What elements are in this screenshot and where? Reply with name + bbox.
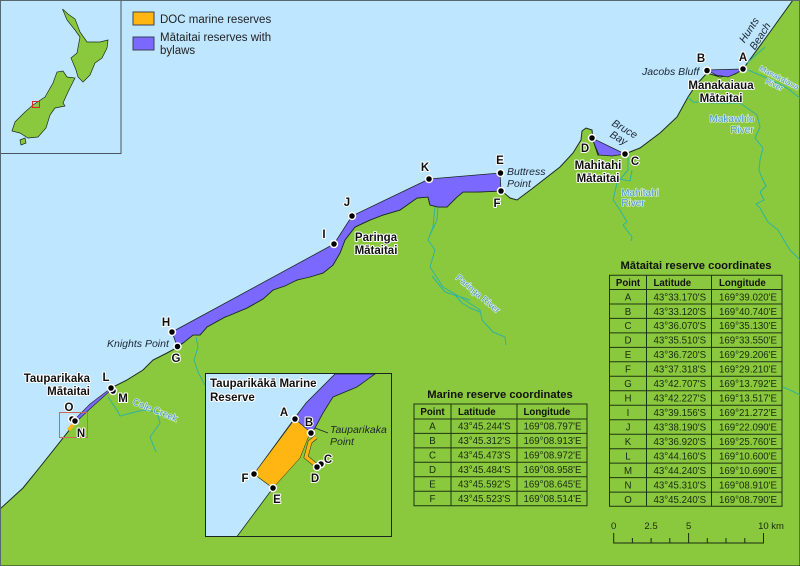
inset land xyxy=(237,374,392,536)
table: marine reserve coordinates: A xyxy=(429,422,436,433)
table: marine reserve coordinates: 43°45.244'S xyxy=(458,422,511,433)
inset point letters: C xyxy=(324,454,332,466)
table: mātaitai reserve coordinates: M xyxy=(624,466,632,477)
reserve: Manakaiaua Mātaitai area xyxy=(707,69,743,77)
table: mātaitai reserve coordinates xyxy=(610,260,782,506)
scale bar: 10 km xyxy=(758,521,784,532)
legend xyxy=(133,12,271,57)
table: mātaitai reserve coordinates: 169°33.550'E xyxy=(719,336,778,347)
point letters on main map: F xyxy=(493,198,501,210)
legend label: mātaitai reserves: Mātaitai reserves with xyxy=(160,32,271,44)
table: mātaitai reserve coordinates: 43°36.070'S xyxy=(654,321,707,332)
table: mātaitai reserve coordinates: 169°39.020'E xyxy=(719,292,778,303)
table: mātaitai reserve coordinates: 169°08.790'E xyxy=(719,495,778,506)
table: mātaitai reserve coordinates: A xyxy=(625,292,632,303)
inset point letters xyxy=(241,407,332,506)
legend swatch: marine reserves xyxy=(133,12,154,25)
table: mātaitai reserve coordinates: O xyxy=(624,495,632,506)
inset point letters: A xyxy=(280,407,288,419)
marine reserve small marker xyxy=(67,423,75,431)
place labels: Bay xyxy=(608,129,630,148)
river labels: Mahitahi xyxy=(621,188,659,199)
table: mātaitai reserve coordinates: Longitude xyxy=(719,278,766,289)
table: mātaitai reserve coordinates: 43°42.707'S xyxy=(654,379,707,390)
table: marine reserve coordinates xyxy=(414,389,587,506)
table: marine reserve coordinates: C xyxy=(429,451,436,462)
reserve: Tauparikaka Mātaitai strip xyxy=(76,388,111,422)
place labels: Point xyxy=(507,178,532,190)
scale bar: 0 xyxy=(611,521,616,532)
table: marine reserve coordinates: Longitude xyxy=(524,407,571,418)
place labels: Mātaitai xyxy=(47,386,90,398)
inset place label: Tauparikaka xyxy=(330,424,387,436)
table: mātaitai reserve coordinates: 169°13.517'E xyxy=(719,394,778,405)
river labels: Makawhio xyxy=(709,114,755,125)
table: mātaitai reserve coordinates: 43°37.318'S xyxy=(654,365,707,376)
river labels: River xyxy=(730,125,754,136)
inset marine reserve tail xyxy=(306,437,317,466)
point markers on main map xyxy=(68,66,746,424)
point letters on main map: O xyxy=(65,402,74,414)
point letters on main map: E xyxy=(496,155,504,167)
place labels: Mātaitai xyxy=(355,245,397,257)
table: mātaitai reserve coordinates: Latitude xyxy=(654,278,692,289)
inset title: Reserve xyxy=(210,392,255,404)
location box on main map xyxy=(60,412,88,438)
table: marine reserve coordinates: 43°45.523'S xyxy=(458,494,511,505)
table: marine reserve coordinates: 43°45.473'S xyxy=(458,451,511,462)
table: mātaitai reserve coordinates: 43°44.240'S xyxy=(654,466,707,477)
point letters on main map: J xyxy=(344,197,350,209)
table: mātaitai reserve coordinates: 169°10.690'E xyxy=(719,466,778,477)
inset point letters: F xyxy=(241,473,249,485)
mātaitai table title: Mātaitai reserve coordinates xyxy=(620,260,772,272)
table: marine reserve coordinates: 43°45.312'S xyxy=(458,436,511,447)
place labels xyxy=(24,15,774,398)
marine table grid xyxy=(414,404,587,506)
river labels: River xyxy=(621,198,645,209)
table: mātaitai reserve coordinates: 43°35.510'S xyxy=(654,336,707,347)
place labels: Buttress xyxy=(507,166,546,178)
table: mātaitai reserve coordinates: E xyxy=(625,350,632,361)
table: mātaitai reserve coordinates: 43°36.920'S xyxy=(654,437,707,448)
river labels: River xyxy=(764,77,785,93)
table: mātaitai reserve coordinates: 169°25.760'E xyxy=(719,437,778,448)
place labels: Beach xyxy=(747,20,774,52)
table: mātaitai reserve coordinates: 43°44.160'S xyxy=(654,451,707,462)
table: mātaitai reserve coordinates: 43°36.720'S xyxy=(654,350,707,361)
river labels: Cole Creek xyxy=(131,397,179,425)
table: marine reserve coordinates: 169°08.913'E xyxy=(524,436,582,447)
inset marine reserve area xyxy=(254,419,311,488)
table: mātaitai reserve coordinates: 43°45.310'S xyxy=(654,480,707,491)
point letters on main map: I xyxy=(322,229,326,241)
table: mātaitai reserve coordinates: C xyxy=(624,321,632,332)
inset mātaitai area xyxy=(295,374,375,433)
South Island xyxy=(12,71,75,138)
table: mātaitai reserve coordinates: 169°40.740'E xyxy=(719,307,778,318)
reserve: Paringa Mātaitai area xyxy=(172,173,501,346)
table: marine reserve coordinates: 43°45.484'S xyxy=(458,465,511,476)
table: marine reserve coordinates: 169°08.514'E xyxy=(524,494,582,505)
place labels: Mātaitai xyxy=(577,173,619,185)
table: mātaitai reserve coordinates: 169°29.206'E xyxy=(719,350,778,361)
table: marine reserve coordinates: F xyxy=(430,494,436,505)
table: mātaitai reserve coordinates: 43°45.240'S xyxy=(654,495,707,506)
location box xyxy=(32,102,40,108)
marine table title: Marine reserve coordinates xyxy=(427,389,573,401)
table: mātaitai reserve coordinates: 43°39.156'S xyxy=(654,408,707,419)
point letters on main map: A xyxy=(739,52,747,64)
North Island xyxy=(62,9,108,82)
table: mātaitai reserve coordinates: J xyxy=(626,422,631,434)
inset frame xyxy=(206,374,392,536)
river labels: Manakaiaua xyxy=(758,64,800,92)
table: mātaitai reserve coordinates: 169°13.792'E xyxy=(719,379,778,390)
scale bar: 2.5 xyxy=(644,521,658,532)
point letters on main map xyxy=(65,52,747,440)
point letters on main map: G xyxy=(172,353,181,365)
mātaitai table grid xyxy=(610,275,782,506)
table: marine reserve coordinates: 169°08.958'E xyxy=(524,465,582,476)
legend swatch: mātaitai reserves xyxy=(133,37,154,50)
place labels: Jacobs Bluff xyxy=(641,66,700,78)
scale bar xyxy=(611,521,784,543)
point letters on main map: M xyxy=(118,393,128,405)
table: marine reserve coordinates: 43°45.592'S xyxy=(458,480,511,490)
point letters on main map: L xyxy=(102,372,110,384)
inset point letters: B xyxy=(305,417,313,429)
inset leader line xyxy=(315,428,328,433)
table: mātaitai reserve coordinates: B xyxy=(625,307,631,318)
table: mātaitai reserve coordinates: 169°35.130'E xyxy=(719,321,778,332)
legend label: mātaitai reserves: bylaws xyxy=(160,45,195,57)
table: marine reserve coordinates: Latitude xyxy=(458,407,496,418)
table: marine reserve coordinates: D xyxy=(429,465,436,476)
table: mātaitai reserve coordinates: 43°33.120'S xyxy=(654,307,707,318)
table: marine reserve coordinates: 169°08.972'E xyxy=(524,451,582,462)
table: mātaitai reserve coordinates: 169°22.090'E xyxy=(719,422,778,434)
table: marine reserve coordinates: 169°08.645'E xyxy=(524,480,582,490)
point letters on main map: H xyxy=(162,317,170,329)
inset title: Tauparikākā Marine xyxy=(210,378,317,390)
table: mātaitai reserve coordinates: Point xyxy=(616,278,641,289)
table: mātaitai reserve coordinates: 43°38.190'S xyxy=(654,422,707,434)
inset map: Tauparikākā Marine Reserve xyxy=(206,374,392,536)
table: mātaitai reserve coordinates: 169°10.600'E xyxy=(719,451,778,462)
place labels: Hunts xyxy=(737,15,762,45)
place labels: Knights Point xyxy=(107,338,170,350)
table: mātaitai reserve coordinates: F xyxy=(625,365,631,376)
table: mātaitai reserve coordinates: I xyxy=(627,408,629,419)
table: mātaitai reserve coordinates: 169°21.272'E xyxy=(719,408,778,419)
place labels: Mahitahi xyxy=(575,160,621,172)
table: mātaitai reserve coordinates: K xyxy=(625,437,632,448)
place labels: Manakaiaua xyxy=(688,80,754,92)
place labels: Mātaitai xyxy=(700,93,742,105)
Stewart Island xyxy=(20,138,26,145)
table: mātaitai reserve coordinates: N xyxy=(624,480,632,491)
table: mātaitai reserve coordinates: 43°42.227'S xyxy=(654,394,707,405)
table: marine reserve coordinates: 169°08.797'E xyxy=(524,422,582,433)
point letters on main map: D xyxy=(581,143,589,155)
rivers xyxy=(108,47,800,452)
table: mātaitai reserve coordinates: 169°08.910'E xyxy=(719,480,778,491)
inset map: New Zealand xyxy=(0,0,121,154)
reserve: Mahitahi Mātaitai area xyxy=(592,138,625,156)
inset point letters: D xyxy=(311,473,319,485)
inset point letters: E xyxy=(273,494,281,506)
inset markers xyxy=(250,416,324,492)
legend label: marine reserves: DOC marine reserves xyxy=(160,14,271,26)
table: mātaitai reserve coordinates: 43°33.170'S xyxy=(654,292,707,303)
scale bar: 5 xyxy=(686,521,691,532)
table: mātaitai reserve coordinates: 169°29.210'E xyxy=(719,365,778,376)
place labels: Paringa xyxy=(355,232,398,244)
table: marine reserve coordinates: B xyxy=(429,436,436,447)
table: mātaitai reserve coordinates: L xyxy=(625,451,631,462)
point letters on main map: N xyxy=(77,428,85,440)
table: mātaitai reserve coordinates: H xyxy=(624,394,632,405)
point letters on main map: K xyxy=(421,162,430,174)
inset place label: Point xyxy=(330,436,355,448)
table: mātaitai reserve coordinates: G xyxy=(624,379,632,390)
table: marine reserve coordinates: E xyxy=(429,480,436,490)
river labels xyxy=(131,64,800,425)
table: marine reserve coordinates: Point xyxy=(420,407,445,418)
place labels: Tauparikaka xyxy=(24,373,91,385)
place labels: Bruce xyxy=(610,117,640,142)
point letters on main map: B xyxy=(697,53,705,65)
river labels: Paringa River xyxy=(454,272,502,315)
point letters on main map: C xyxy=(631,156,639,168)
table: mātaitai reserve coordinates: D xyxy=(624,336,632,347)
